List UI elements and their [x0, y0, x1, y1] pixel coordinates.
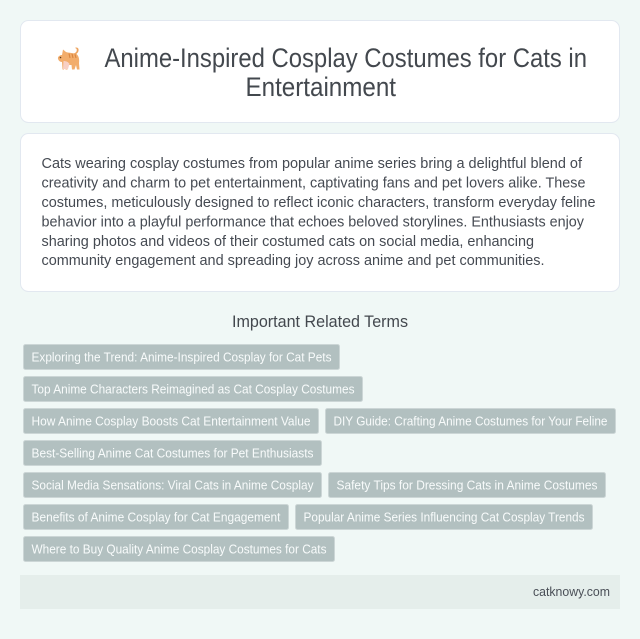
tag list: related terms: [24, 344, 616, 562]
tag 6: [24, 472, 322, 498]
tag 3: How Anime Cosplay Boosts Cat Entertainment Value: [32, 414, 310, 428]
tag 7: Safety Tips for Dressing Cats in Anime Costumes: [336, 478, 598, 492]
footer text: site name: catknowy.com: [533, 584, 610, 599]
text block: description: costumes, meticulously designed to reflect iconic characters, transform everyday feline: [42, 194, 596, 211]
tag 3: [24, 408, 318, 434]
title: Entertainment: [246, 72, 397, 102]
tag 2: [24, 376, 362, 402]
footer bar: [20, 575, 620, 609]
tag 10: [24, 536, 334, 562]
tag 8: Benefits of Anime Cosplay for Cat Engagement: [32, 510, 281, 524]
tag 7: [328, 472, 606, 498]
tag 10: Where to Buy Quality Anime Cosplay Costumes for Cats: [32, 542, 327, 556]
icon: cat: [58, 47, 80, 70]
tag 5: [24, 440, 322, 466]
tag 9: Popular Anime Series Influencing Cat Cosplay Trends: [304, 510, 585, 524]
tag 2: Top Anime Characters Reimagined as Cat Cosplay Costumes: [32, 382, 355, 396]
text block: description: creativity and charm to pet entertainment, captivating fans and pet lovers alike. These: [42, 174, 586, 192]
title: [104, 43, 587, 102]
heading: related terms: Important Related Terms: [232, 312, 408, 331]
tag 5: Best-Selling Anime Cat Costumes for Pet Enthusiasts: [32, 446, 314, 460]
text block: description: community engagement and spreading joy across anime and pet communities.: [42, 252, 544, 269]
tag 1: Exploring the Trend: Anime-Inspired Cosplay for Cat Pets: [32, 350, 332, 364]
text block: description: [42, 155, 596, 269]
tag 1: [24, 344, 340, 370]
tag 8: [24, 504, 288, 530]
tag 9: [296, 504, 592, 530]
text block: description: sharing photos and videos of their costumed cats on social media, enhancing: [42, 233, 534, 250]
panel: description card: [20, 134, 620, 292]
title: Anime-Inspired Cosplay Costumes for Cats in: [104, 43, 587, 73]
tag 4: DIY Guide: Crafting Anime Costumes for Your Feline: [334, 414, 608, 428]
panel: title card: [20, 20, 620, 122]
tag 6: Social Media Sensations: Viral Cats in Anime Cosplay: [32, 478, 314, 492]
text block: description: Cats wearing cosplay costumes from popular anime series bring a delightful blend of: [42, 155, 583, 172]
tag 4: [326, 408, 616, 434]
text block: description: behavior into a playful performance that echoes beloved storylines. Enthusiasts enjoy: [42, 214, 584, 230]
